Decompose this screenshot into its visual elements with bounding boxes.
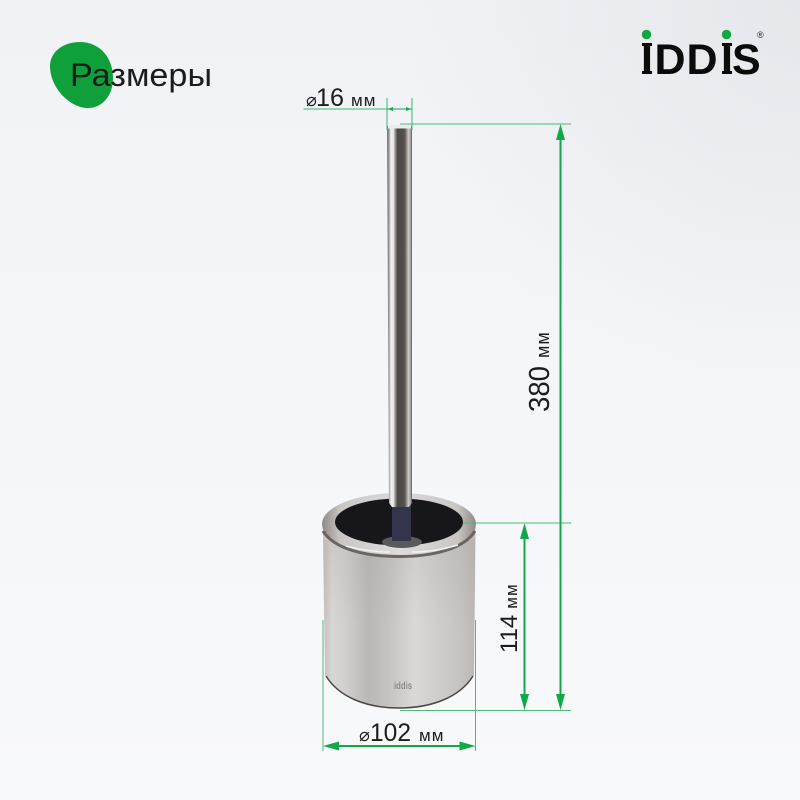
registered mark: ® bbox=[757, 30, 764, 40]
vertical arrow bbox=[560, 130, 562, 704]
cup rim bbox=[322, 493, 476, 555]
rim lower dark reflection bbox=[323, 531, 475, 556]
extension lines bbox=[323, 620, 476, 751]
rim highlight bbox=[346, 545, 458, 552]
arrow heads bbox=[520, 523, 529, 710]
arrow line bbox=[387, 108, 412, 110]
logo dot right bbox=[722, 30, 731, 39]
label: 114мм bbox=[496, 583, 523, 653]
handle reflection in interior bbox=[392, 503, 411, 541]
logo I serifs bbox=[642, 43, 732, 74]
dimension lines bbox=[304, 98, 412, 130]
handle top cap bbox=[388, 125, 411, 128]
label: ⌀ bbox=[306, 90, 317, 110]
horizontal arrow bbox=[330, 745, 469, 747]
dimension: handle diameter 16 mm bbox=[304, 84, 412, 130]
product: toilet brush holder bbox=[322, 125, 476, 708]
logo wordmark: IDDIS bbox=[641, 36, 761, 84]
cup body bbox=[323, 525, 476, 708]
label: мм bbox=[533, 331, 553, 358]
cup body upper shading bbox=[323, 540, 476, 625]
logo: IDDIS bbox=[641, 30, 764, 84]
label: 380 bbox=[524, 366, 556, 412]
inner holder base bbox=[382, 536, 422, 548]
heading text: Размеры bbox=[70, 57, 212, 93]
handle bbox=[387, 126, 412, 507]
logo dot left bbox=[642, 30, 651, 39]
label: ⌀ bbox=[359, 725, 370, 745]
label: мм bbox=[419, 726, 444, 745]
arrow heads bbox=[556, 124, 565, 710]
dimension: cup height 114 mm bbox=[496, 523, 529, 710]
label: 16 bbox=[316, 84, 344, 112]
small cup logo: iddis bbox=[394, 681, 412, 692]
label: мм bbox=[351, 91, 376, 110]
heading: Размеры bbox=[50, 42, 212, 108]
arrow heads bbox=[388, 107, 411, 111]
cup base shadow edge bbox=[326, 676, 473, 708]
extension lines bbox=[400, 124, 571, 710]
cup interior bbox=[335, 498, 463, 546]
dimension: cup diameter 102 mm bbox=[323, 620, 476, 751]
icon: green blob bbox=[50, 42, 113, 108]
vertical arrow bbox=[524, 530, 526, 704]
arrow heads bbox=[323, 742, 476, 750]
label: 102 bbox=[370, 719, 411, 747]
dimension: total height 380 mm bbox=[400, 124, 571, 710]
